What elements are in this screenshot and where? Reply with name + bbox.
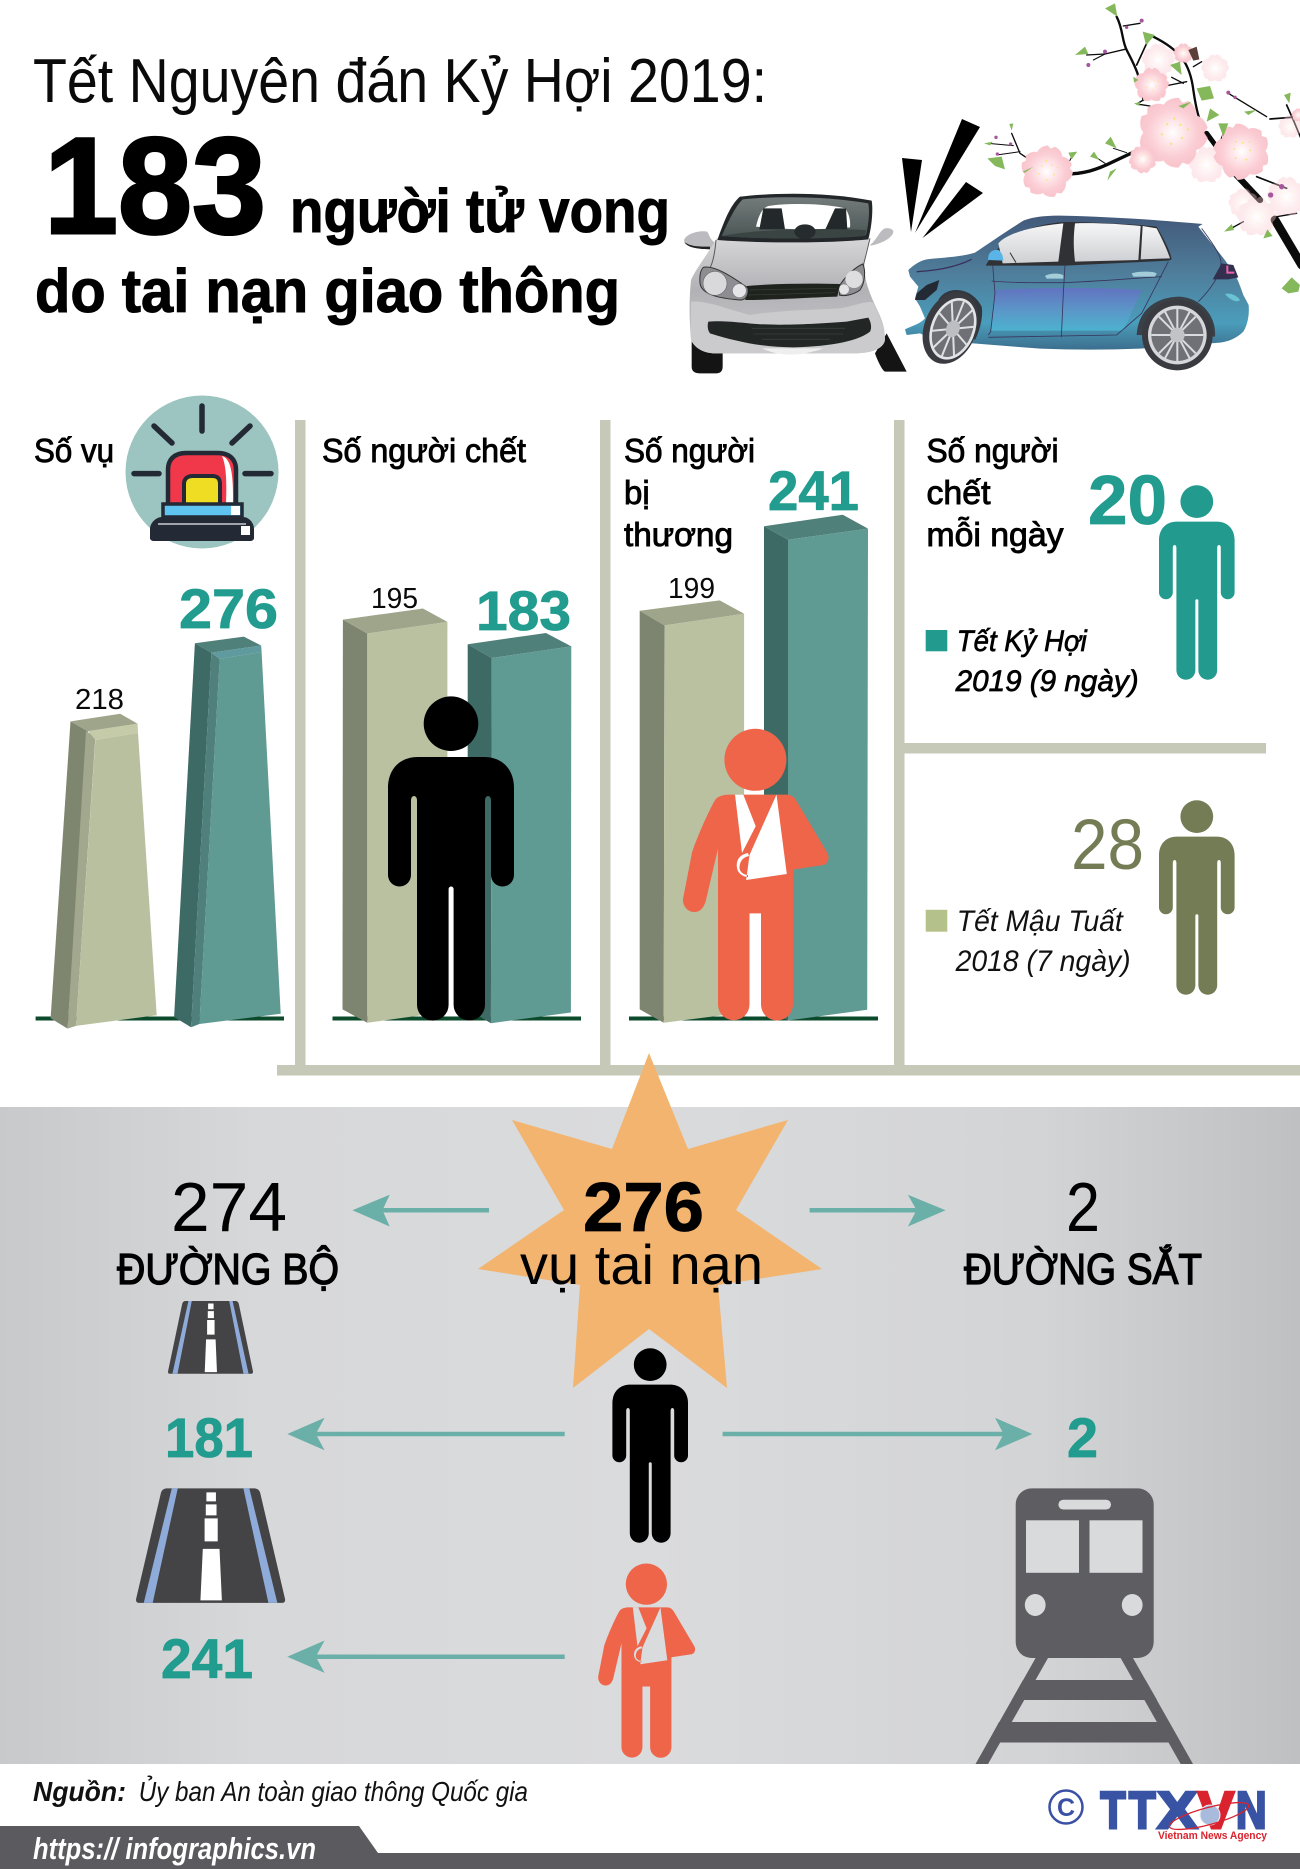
icon: black person: [612, 1348, 688, 1543]
panel: Số người bị thương: [624, 432, 878, 1023]
agency letters: V: [1198, 1782, 1234, 1840]
value: 181: 181: [165, 1406, 253, 1469]
bar 2018: 199: [640, 600, 744, 1023]
title line 1: Tết Nguyên đán Kỷ Hợi 2019:: [33, 47, 767, 116]
source: Ủy ban An toàn giao thông Quốc gia: [132, 1774, 528, 1807]
value: 276: 276: [179, 577, 278, 640]
baseline: [36, 1016, 284, 1020]
heading: Số người chết mỗi ngày: chết: [926, 474, 990, 511]
baseline: [332, 1016, 581, 1020]
front wheel: [912, 283, 989, 372]
icon: injured person: [683, 729, 829, 1020]
icon: train: [976, 1488, 1193, 1764]
heading: Số người bị thương: bị: [624, 474, 650, 511]
arrow: deaths to road: [287, 1418, 565, 1450]
footer bar: [0, 1826, 1300, 1869]
baseline: [629, 1016, 878, 1020]
copyright mark: [1050, 1790, 1082, 1824]
value: 20: 20: [1088, 461, 1167, 539]
big number 183: 183: [44, 110, 266, 263]
agency letters: N: [1236, 1782, 1266, 1840]
agency letters: [1100, 1782, 1266, 1840]
heading: Số người chết mỗi ngày: mỗi ngày: [926, 516, 1064, 553]
title line 3: do tai nạn giao thông: [35, 257, 620, 325]
panel: Số người chết: [322, 432, 581, 1023]
agency name: Vietnam News Agency: [1158, 1830, 1268, 1842]
agency letters: T: [1129, 1782, 1156, 1840]
illustration: plum blossom branch: [984, 3, 1300, 293]
value: 241: 241: [768, 459, 859, 522]
icon: silver car: [684, 194, 907, 373]
heading: Số người chết mỗi ngày: [926, 432, 1064, 553]
arrow: to rail: [810, 1195, 946, 1226]
panel: Số vụ: [34, 396, 284, 1029]
bar 2019: 241: [764, 515, 868, 1020]
legend: Tết Kỷ Hợi 2019: [926, 625, 1139, 698]
front headlight wreck: [915, 280, 939, 300]
footer url: https:// infographics.vn: [33, 1831, 316, 1866]
heading: Số vụ: Số vụ: [34, 432, 114, 469]
value: 183: 183: [476, 579, 571, 642]
rear wheel: [1142, 300, 1213, 370]
arrow: injured to road: [287, 1640, 565, 1673]
value: 276 accidents: 276: [583, 1168, 704, 1246]
label: ĐƯỜNG SẮT: ĐƯỜNG SẮT: [964, 1244, 1202, 1294]
wheel arches: [1137, 297, 1215, 337]
title: [33, 47, 767, 325]
arrow: deaths to rail: [723, 1418, 1032, 1450]
title line 2: người tử vong: [290, 177, 670, 245]
icon: injured person: [598, 1563, 695, 1758]
panel: accident breakdown: [0, 1053, 1300, 1764]
bar 2018: 195: [342, 608, 447, 1023]
bar 2018: 218: [51, 714, 157, 1029]
legend: Tết Mậu Tuất 2018: Tết Mậu Tuất: [957, 905, 1124, 938]
agency letters: X: [1158, 1782, 1197, 1840]
copyright mark: C: [1057, 1794, 1075, 1822]
heading: Số người chết mỗi ngày: Số người: [926, 432, 1058, 469]
icon: small road: [168, 1301, 253, 1374]
legend: Tết Kỷ Hợi 2019: 2019 (9 ngày): [955, 665, 1139, 698]
heading: Số người chết: Số người chết: [322, 432, 526, 469]
logo: TTXVN: [1050, 1782, 1268, 1842]
value: 218: 218: [75, 684, 124, 716]
icon: siren: [126, 396, 278, 548]
value: 2 rail: 2: [1066, 1168, 1100, 1246]
heading: Số người bị thương: [624, 432, 755, 553]
panel dividers: [277, 420, 1300, 1076]
arrow: to road: [352, 1195, 489, 1226]
value: 241 road injured: 241: [161, 1627, 253, 1690]
icon: blue car: [905, 216, 1249, 372]
icon: black person: [388, 696, 514, 1021]
agency letters: T: [1100, 1782, 1126, 1840]
value: 2 rail deaths: 2: [1067, 1406, 1098, 1469]
value: 195: 195: [371, 583, 418, 615]
orbit: [1167, 1797, 1251, 1835]
value: 274 road: 274: [171, 1168, 287, 1246]
icon: teal person: [1159, 485, 1235, 680]
source: Nguồn:: [33, 1776, 126, 1807]
heading: Số người bị thương: Số người: [624, 432, 755, 469]
panel background: [0, 1107, 1300, 1764]
legend: Tết Mậu Tuất 2018: 2018 (7 ngày): [955, 945, 1131, 978]
icon: olive person: [1159, 800, 1235, 995]
icon: collision spikes: [902, 119, 983, 238]
bar 2019: 183: [468, 633, 571, 1023]
legend: Tết Kỷ Hợi 2019: Tết Kỷ Hợi: [957, 625, 1088, 658]
icon: orange star: [478, 1053, 822, 1388]
legend: Tết Mậu Tuất 2018: [926, 905, 1131, 978]
value: 199: 199: [668, 573, 715, 605]
bar 2019: 276: [174, 637, 281, 1027]
icon: large road: [136, 1488, 285, 1603]
heading: Số người bị thương: thương: [624, 516, 733, 553]
label: ĐƯỜNG BỘ: ĐƯỜNG BỘ: [117, 1244, 339, 1294]
globe: [1200, 1805, 1220, 1825]
panel: Số người chết mỗi ngày: [926, 432, 1235, 995]
value: 28: 28: [1071, 806, 1144, 885]
label: vụ tai nạn: vụ tai nạn: [520, 1233, 763, 1296]
